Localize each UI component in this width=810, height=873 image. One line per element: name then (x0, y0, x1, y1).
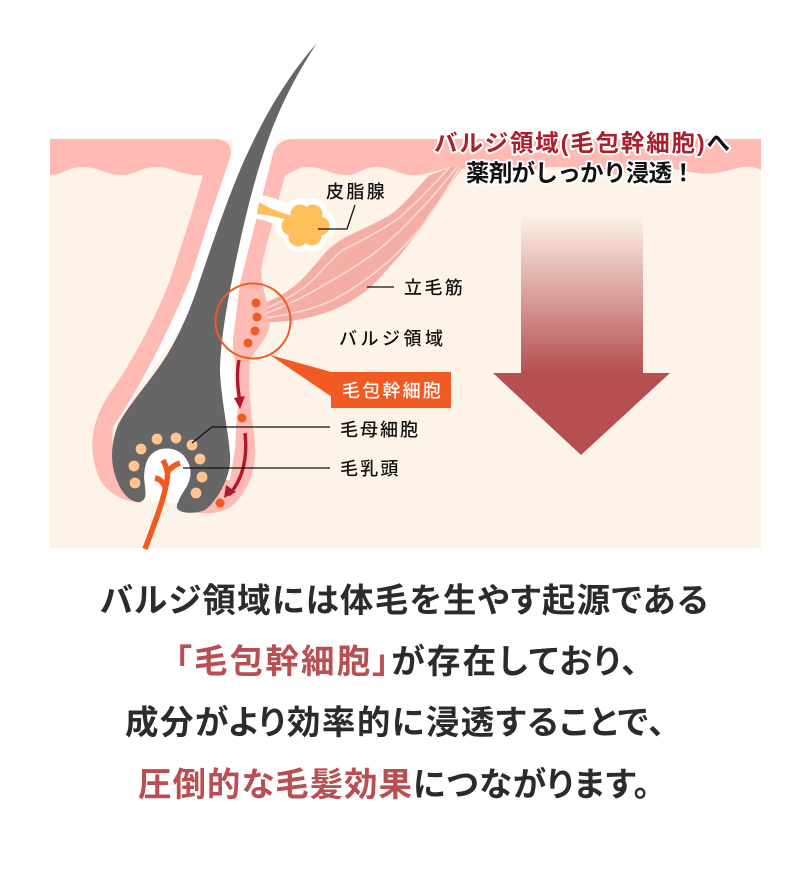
stem cell dots (216, 298, 262, 508)
callout box (331, 372, 451, 408)
body line 4: 圧倒的な毛髪効果につながります。 (138, 766, 650, 804)
label: bulge region: バルジ領域 (339, 329, 446, 349)
label: papilla: 毛乳頭 (340, 459, 401, 479)
panel: skin background (50, 139, 761, 548)
gland lobes (282, 204, 330, 246)
skin surface left with follicle sheath (50, 139, 231, 503)
heading (434, 130, 730, 186)
body line 1: バルジ領域には体毛を生やす起源である (100, 583, 708, 620)
gland duct and halo (258, 207, 300, 222)
white follicle gap (113, 139, 277, 480)
muscle fibres (267, 167, 460, 318)
migration arrows (229, 360, 246, 495)
heading line 2: 薬剤がしっかり浸透！ (466, 159, 695, 186)
gland lobes halo (276, 198, 336, 252)
callout pointer (270, 355, 335, 399)
sebaceous gland (257, 198, 336, 252)
callout label: 毛包幹細胞 (342, 381, 443, 401)
hair shaft (112, 43, 317, 513)
arrector pili muscle (267, 167, 463, 322)
label: arrector pili: 立毛筋 (404, 278, 465, 298)
blood vessel (145, 460, 180, 549)
label: sebaceous gland: 皮脂腺 (326, 182, 387, 202)
bulge callout circle (216, 284, 290, 358)
callout (270, 355, 451, 408)
arrow heads (224, 396, 245, 498)
body line 3: 成分がより効率的に浸透することで、 (125, 704, 665, 742)
dermal papilla (144, 448, 190, 503)
matrix cells (129, 433, 207, 498)
big down arrow (493, 215, 670, 455)
body line 2: 「毛包幹細胞」が存在しており、 (175, 643, 638, 681)
skin surface right with follicle sheath (196, 139, 761, 513)
muscle body (267, 167, 463, 322)
body copy (100, 583, 708, 804)
gland duct (257, 202, 296, 222)
label: matrix cells: 毛母細胞 (340, 420, 420, 440)
heading line 1: バルジ領域(毛包幹細胞)へ (434, 130, 730, 156)
leader lines (183, 205, 394, 468)
